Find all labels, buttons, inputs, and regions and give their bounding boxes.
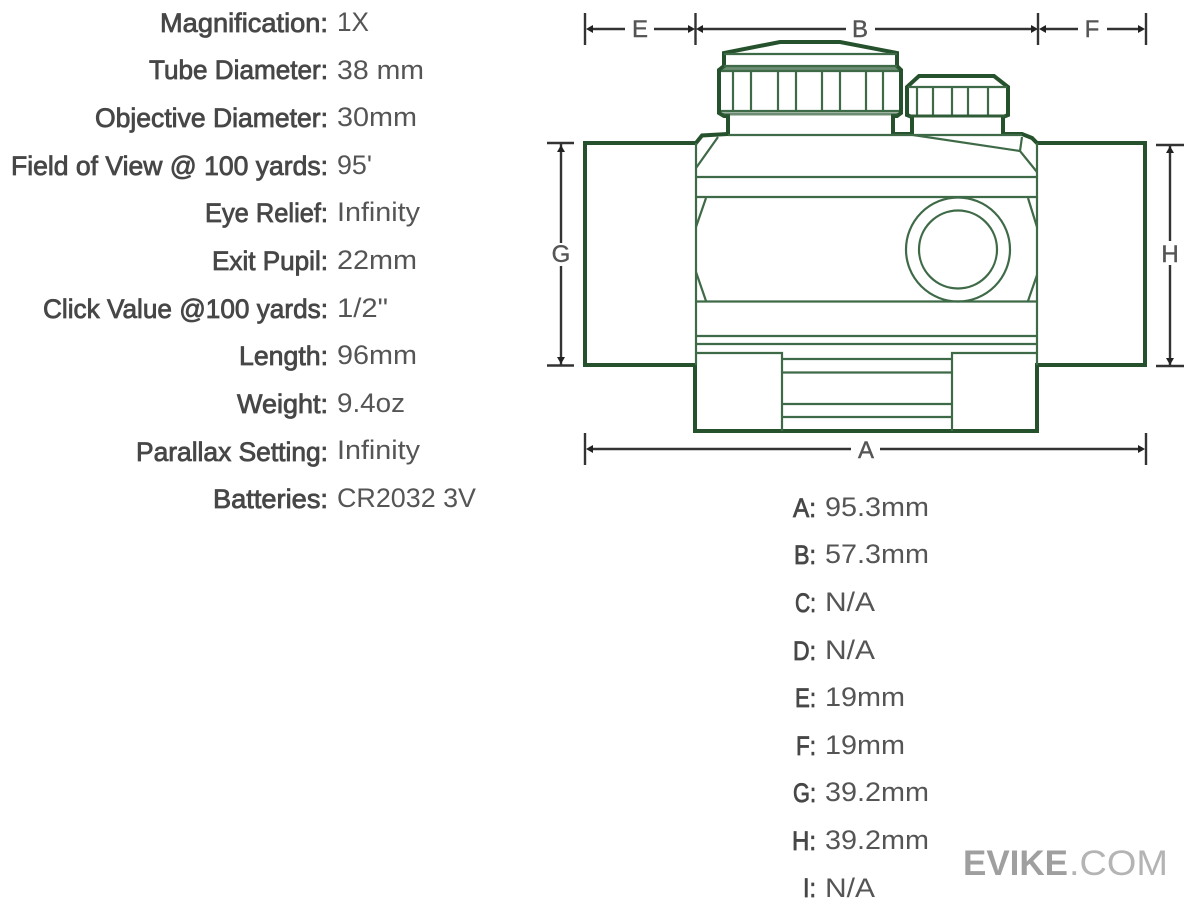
dimension A: [585, 433, 1146, 465]
value H: H:: [792, 826, 816, 856]
diagram: sight line drawing: [585, 42, 1145, 431]
spec: eye relief: [205, 197, 421, 228]
big adjustment knob details: [721, 54, 899, 114]
value D: [793, 635, 875, 666]
dimension B: B: [852, 16, 868, 43]
lens circles: [906, 198, 1010, 302]
dimension H: H: [1161, 241, 1179, 268]
sight outer silhouette: [585, 42, 1145, 431]
spec: field of view: Field of View @ 100 yards:: [11, 151, 328, 181]
value E: 19mm: [825, 682, 905, 712]
value I: [803, 873, 875, 900]
dimension G: G: [552, 241, 570, 268]
value C: N/A: [825, 587, 875, 617]
spec: objective diameter: 30mm: [337, 102, 417, 132]
dimension H: [1156, 145, 1184, 366]
dimension E: E: [632, 16, 648, 43]
dimension values list: [792, 492, 929, 900]
value G: [793, 777, 929, 808]
spec: exit pupil: [212, 245, 417, 276]
value B: 57.3mm: [825, 539, 929, 569]
value H: 39.2mm: [825, 825, 929, 855]
value B: [794, 539, 929, 570]
spec: objective diameter: Objective Diameter:: [95, 103, 328, 133]
spec: length: 96mm: [337, 340, 417, 370]
spec: field of view: 95': [337, 150, 372, 180]
spec: weight: [237, 388, 405, 419]
dimension B: [696, 13, 1038, 45]
value B: B:: [794, 540, 816, 570]
small adjustment knob details: [908, 87, 1007, 116]
spec: length: [239, 340, 417, 371]
spec: parallax setting: [136, 435, 421, 467]
value A: 95.3mm: [825, 492, 929, 522]
spec: exit pupil: 22mm: [337, 245, 417, 275]
value E: [795, 682, 905, 713]
watermark logo: [963, 844, 1168, 883]
value G: 39.2mm: [825, 777, 929, 807]
value A: [793, 492, 929, 523]
spec: weight: 9.4oz: [337, 388, 405, 418]
spec: click value: 1/2": [337, 293, 388, 323]
value D: D:: [793, 636, 816, 666]
value H: [792, 825, 929, 856]
specifications list: [11, 7, 476, 514]
value D: N/A: [825, 635, 875, 665]
spec: parallax setting: Infinity: [337, 435, 421, 465]
value C: C:: [795, 588, 816, 618]
spec: exit pupil: Exit Pupil:: [212, 246, 328, 276]
dimension A: A: [858, 437, 874, 464]
dimension F: F: [1085, 16, 1099, 43]
spec: length: Length:: [239, 341, 328, 371]
spec: magnification: Magnification:: [160, 8, 328, 38]
watermark logo: EVIKE: [963, 844, 1068, 883]
dimension E: [585, 13, 695, 45]
watermark logo: .COM: [1069, 844, 1168, 883]
spec: eye relief: Eye Relief:: [205, 198, 328, 228]
value C: [795, 587, 875, 618]
value F: 19mm: [825, 730, 905, 760]
spec: parallax setting: Parallax Setting:: [136, 437, 328, 467]
spec: click value: Click Value @100 yards:: [43, 294, 328, 324]
spec: batteries: CR2032 3V: [337, 483, 476, 513]
spec: magnification: 1X: [337, 7, 369, 37]
spec: weight: Weight:: [237, 389, 328, 419]
value G: G:: [793, 778, 816, 808]
spec: eye relief: Infinity: [337, 197, 421, 227]
value F: [796, 730, 905, 761]
value E: E:: [795, 683, 816, 713]
spec: batteries: [213, 483, 476, 514]
dimension G: [547, 143, 574, 366]
spec: tube diameter: [149, 55, 424, 85]
dimension F: [1038, 13, 1146, 45]
spec: tube diameter: Tube Diameter:: [149, 55, 328, 85]
spec: tube diameter: 38 mm: [337, 55, 424, 85]
sight body details: [696, 135, 1037, 431]
value A: A:: [793, 493, 816, 523]
value F: F:: [796, 731, 816, 761]
spec: batteries: Batteries:: [213, 484, 328, 514]
